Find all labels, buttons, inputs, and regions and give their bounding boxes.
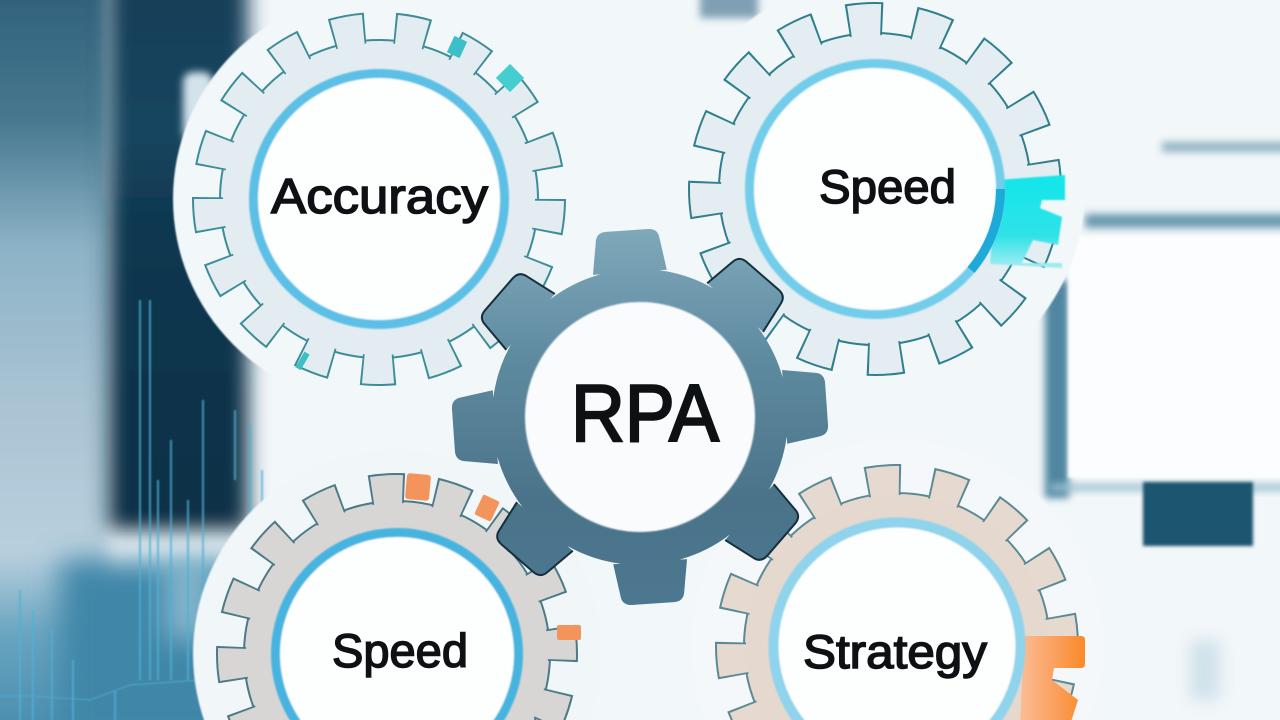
label: Strategy: Strategy bbox=[803, 625, 988, 678]
gear body and teeth bbox=[211, 468, 583, 720]
progress ring bbox=[750, 64, 1000, 314]
halo bbox=[193, 450, 601, 720]
orange highlight bbox=[1020, 636, 1085, 720]
teal tooth accents bbox=[295, 36, 524, 370]
central RPA gear bbox=[452, 229, 828, 605]
gear: Speed top right bbox=[665, 0, 1085, 399]
gear body and teeth bbox=[210, 30, 548, 368]
ring highlight arc bbox=[971, 189, 1001, 270]
gear: Speed bottom left bbox=[193, 450, 601, 720]
label: Accuracy: Accuracy bbox=[271, 170, 489, 224]
progress ring bbox=[276, 532, 518, 720]
gear silhouette bbox=[452, 229, 828, 605]
label: RPA: RPA bbox=[571, 369, 719, 459]
gear body and teeth bbox=[682, 0, 1068, 382]
chart lines in background bbox=[0, 300, 262, 720]
hub bbox=[525, 302, 755, 532]
gear body and teeth bbox=[706, 455, 1088, 720]
teal highlight bbox=[990, 175, 1065, 268]
gear: Accuracy bbox=[173, 0, 585, 405]
label: Speed: Speed bbox=[332, 624, 468, 677]
halo bbox=[665, 0, 1085, 399]
progress ring bbox=[254, 74, 504, 324]
progress ring bbox=[774, 522, 1020, 720]
orange tooth accents bbox=[405, 473, 581, 640]
halo bbox=[691, 440, 1103, 720]
halo bbox=[173, 0, 585, 405]
gear: Strategy bbox=[691, 440, 1103, 720]
label: Speed: Speed bbox=[819, 160, 956, 213]
tooth edge shadows bbox=[475, 252, 805, 582]
